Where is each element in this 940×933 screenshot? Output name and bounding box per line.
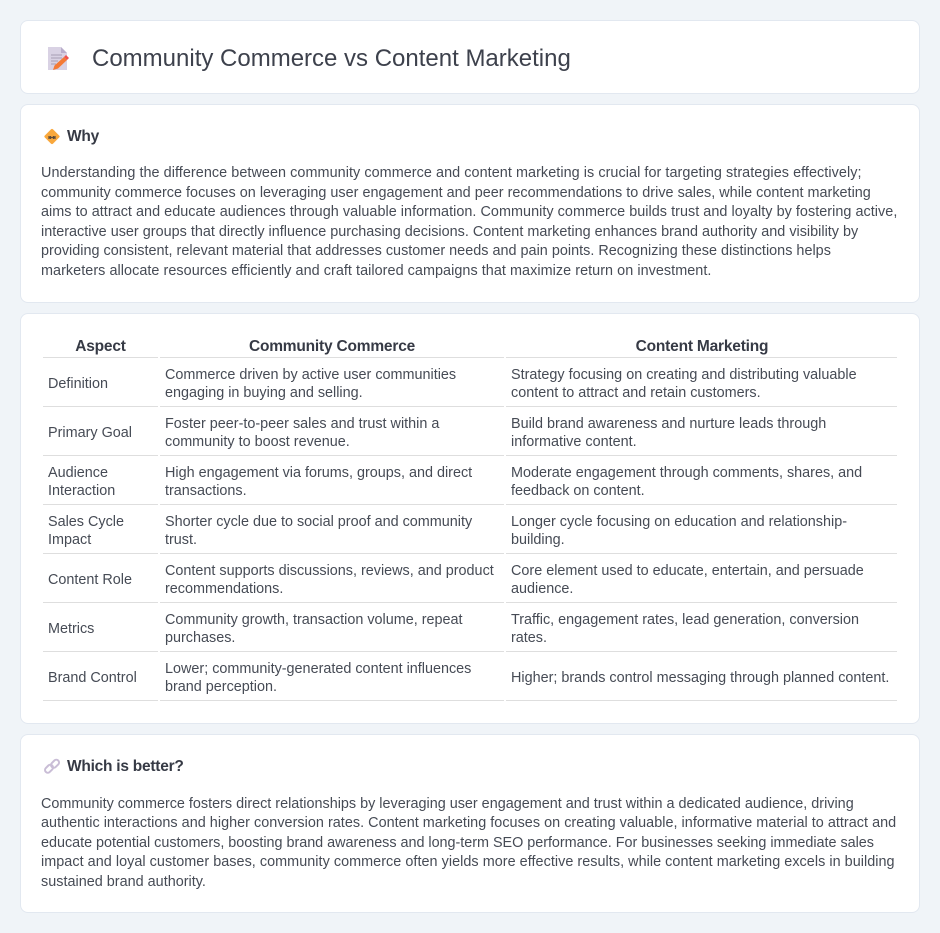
row: content role: Content Role [48, 572, 132, 588]
primary goal: community commerce: community to boost revenue. [165, 434, 350, 450]
brand control: content marketing: Higher; brands control messaging through planned content. [511, 670, 889, 686]
text: which is better paragraph: impact and loyal customer bases, community commerce often yields more effective results, while content marketing excels in building [41, 854, 895, 870]
metrics: content marketing [511, 612, 859, 646]
metrics: community commerce: purchases. [165, 630, 235, 646]
primary goal: content marketing: informative content. [511, 434, 637, 450]
row: sales cycle impact: Sales Cycle [48, 514, 124, 530]
primary goal: community commerce [165, 416, 440, 450]
text: which is better paragraph: educate potential customers, boosting brand awareness and long-term SEO performance. For businesses seeking immediate sales [41, 835, 874, 851]
icon: link [44, 758, 60, 774]
primary goal: content marketing: Build brand awareness and nurture leads through [511, 416, 826, 432]
metrics: community commerce: Community growth, transaction volume, repeat [165, 612, 463, 628]
text: which is better paragraph: Community commerce fosters direct relationships by leveraging user engagement and trust within a dedicated audience, driving [41, 796, 854, 812]
sales cycle impact: content marketing: Longer cycle focusing on education and relationship- [511, 514, 847, 530]
text: why paragraph: providing consistent, relevant material that addresses customer needs and pain points. Recognizing these distinctions helps [41, 243, 831, 259]
audience interaction: community commerce: transactions. [165, 483, 247, 499]
metrics: content marketing: rates. [511, 630, 547, 646]
audience interaction: content marketing: feedback on content. [511, 483, 645, 499]
row: primary goal: Primary Goal [48, 425, 132, 441]
definition: content marketing: content to attract and retain customers. [511, 385, 761, 401]
panel: comparison table [20, 313, 920, 724]
text: why paragraph: interactive user groups that directly influence purchasing decisions. Content marketing enhances brand authority and visibility by [41, 224, 858, 240]
primary goal: community commerce: Foster peer-to-peer sales and trust within a [165, 416, 439, 432]
content role: community commerce: Content supports discussions, reviews, and product [165, 563, 494, 579]
definition: content marketing [511, 367, 857, 401]
panel: header [20, 20, 920, 94]
sales cycle impact: content marketing [511, 514, 847, 548]
text: which is better paragraph: sustained brand authority. [41, 874, 206, 890]
audience interaction: content marketing: Moderate engagement through comments, shares, and [511, 465, 862, 481]
sales cycle impact: community commerce: Shorter cycle due to social proof and community [165, 514, 472, 530]
row: brand control: Brand Control [48, 670, 137, 686]
content role: community commerce: recommendations. [165, 581, 283, 597]
heading: which is better: Which is better? [67, 758, 184, 775]
brand control: community commerce [165, 661, 471, 695]
definition: content marketing: Strategy focusing on creating and distributing valuable [511, 367, 857, 383]
sales cycle impact: community commerce [165, 514, 472, 548]
primary goal: content marketing [511, 416, 826, 450]
audience interaction: community commerce [165, 465, 472, 499]
content role: content marketing [511, 563, 864, 597]
text: which is better paragraph: authentic interactions and higher conversion rates. Content marketing focuses on creating valuable, informative material to attract and [41, 815, 896, 831]
text: why paragraph [41, 165, 897, 279]
text: why paragraph: community commerce focuses on leveraging user engagement and peer recommendations to drive sales, while content marketing [41, 185, 871, 201]
brand control: community commerce: brand perception. [165, 679, 277, 695]
table header: community commerce: Community Commerce [249, 338, 415, 355]
metrics: community commerce [165, 612, 463, 646]
text: why paragraph: Understanding the difference between community commerce and content marketing is crucial for targeting strategies effectively; [41, 165, 862, 181]
audience interaction: content marketing [511, 465, 862, 499]
heading: why: Why [67, 128, 99, 145]
title: Community Commerce vs Content Marketing [92, 45, 571, 72]
text: which is better paragraph [41, 796, 896, 890]
text: why paragraph: aims to attract and educate audiences through valuable information. Community commerce builds trust and loyalty by fostering active, [41, 204, 897, 220]
row: sales cycle impact: Impact [48, 532, 91, 548]
icon: diamond sign [44, 128, 60, 144]
panel: which is better [20, 734, 920, 913]
row: sales cycle impact [48, 514, 124, 548]
sales cycle impact: community commerce: trust. [165, 532, 197, 548]
panel: why [20, 104, 920, 303]
audience interaction: community commerce: High engagement via forums, groups, and direct [165, 465, 472, 481]
row: metrics: Metrics [48, 621, 94, 637]
table header: content marketing: Content Marketing [636, 338, 768, 355]
definition: community commerce: Commerce driven by active user communities [165, 367, 456, 383]
definition: community commerce: engaging in buying and selling. [165, 385, 363, 401]
row: definition: Definition [48, 376, 108, 392]
row: audience interaction [48, 465, 115, 499]
definition: community commerce [165, 367, 456, 401]
sales cycle impact: content marketing: building. [511, 532, 565, 548]
content role: content marketing: Core element used to educate, entertain, and persuade [511, 563, 864, 579]
icon: document with pencil [48, 47, 69, 70]
content role: community commerce [165, 563, 494, 597]
text: why paragraph: marketers allocate resources efficiently and craft tailored campaigns that maximize return on investment. [41, 263, 711, 279]
table header: aspect: Aspect [75, 338, 126, 355]
row: audience interaction: Audience [48, 465, 108, 481]
brand control: community commerce: Lower; community-generated content influences [165, 661, 471, 677]
content role: content marketing: audience. [511, 581, 573, 597]
metrics: content marketing: Traffic, engagement rates, lead generation, conversion [511, 612, 859, 628]
row: audience interaction: Interaction [48, 483, 115, 499]
